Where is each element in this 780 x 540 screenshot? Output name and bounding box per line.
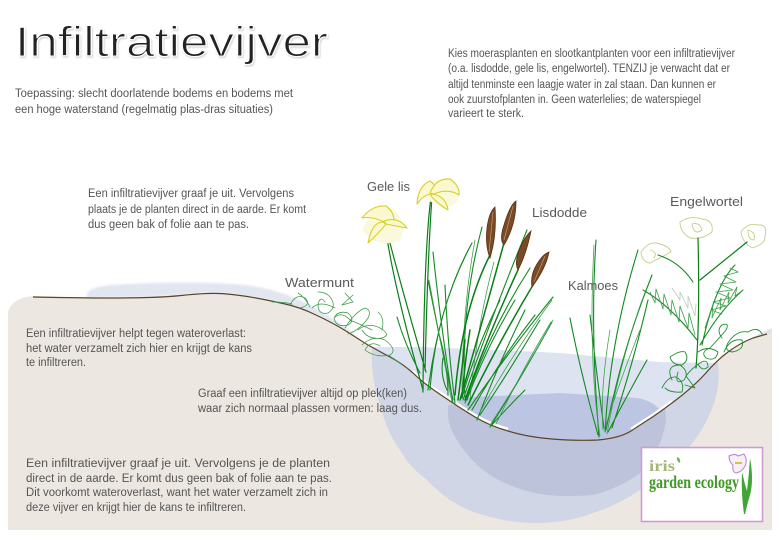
iris flower right: [418, 178, 459, 208]
cattail heads: [486, 207, 495, 258]
text: samenvatting: Een infiltratievijver graaf je uit. Vervolgens je de planten: [26, 458, 330, 470]
soil cross-section: [8, 293, 772, 530]
text: samenvatting: [26, 458, 332, 514]
deep water: [447, 393, 667, 445]
umbel flowers: [680, 218, 712, 238]
text: plantkeuze: [448, 48, 735, 120]
text: plantkeuze: varieert te sterk.: [448, 108, 524, 120]
plant: gele lis: [362, 178, 459, 392]
plant: kalmoes: [570, 240, 652, 437]
thin leaves: [429, 240, 553, 425]
text: wateroverlast: [26, 328, 252, 369]
text: aanleg: [88, 188, 307, 231]
logo leaf mark: [677, 457, 680, 463]
text: toepassing: [15, 88, 294, 116]
label: watermunt: Watermunt: [285, 275, 354, 290]
saturated soil below the pond: [372, 345, 719, 523]
text: wateroverlast: Een infiltratievijver helpt tegen wateroverlast:: [26, 328, 246, 340]
iris stems: [385, 197, 432, 392]
text: samenvatting: direct in de aarde. Er komt dus geen bak of folie aan te pas.: [26, 473, 332, 485]
text: plantkeuze: ook zuurstofplanten in. Geen waterlelies; de waterspiegel: [448, 94, 701, 106]
label: kalmoes: Kalmoes: [568, 278, 618, 293]
stems: [696, 238, 747, 368]
text: plek: [197, 388, 422, 415]
water above ground: [372, 347, 716, 445]
logo iris flower: [729, 454, 746, 473]
wet patch right bank: [745, 328, 772, 341]
logo: iris garden ecology: garden ecology: [649, 472, 739, 492]
text: samenvatting: deze vijver en krijgt hier de kans te infiltreren.: [26, 502, 246, 514]
text: plek: Graaf een infiltratievijver altijd op plek(ken): [198, 388, 407, 400]
fern leaves: [650, 268, 743, 335]
text: aanleg: plaats je de planten direct in de aarde. Er komt: [88, 204, 307, 216]
text: samenvatting: Dit voorkomt wateroverlast, want het water verzamelt zich in: [26, 487, 328, 499]
outer wet zone: [372, 345, 719, 523]
text: plantkeuze: Kies moerasplanten en slootkantplanten voor een infiltratievijver: [448, 48, 735, 60]
text: wateroverlast: het water verzamelt zich hier en krijgt de kans: [26, 343, 252, 355]
text: wateroverlast: te infiltreren.: [26, 357, 86, 369]
logo text: iris: [649, 458, 675, 475]
text: plek: waar zich normaal plassen vormen: laag dus.: [197, 403, 422, 415]
white bank highlight: [413, 371, 672, 429]
text: plantkeuze: altijd tenminste een laagje water in zal staan. Dan kunnen er: [448, 79, 716, 91]
text: aanleg: dus geen bak of folie aan te pas.: [88, 219, 249, 231]
ground scribble: [662, 324, 762, 392]
soil surface: [33, 293, 767, 440]
text: toepassing: Toepassing: slecht doorlatende bodems en bodems met: [15, 88, 294, 100]
logo: iris garden ecology: [642, 448, 762, 522]
text: toepassing: een hoge waterstand (regelmatig plas-dras situaties): [15, 104, 273, 116]
label: gele lis: Gele lis: [367, 179, 410, 194]
label: engelwortel: Engelwortel: [670, 194, 743, 209]
plant labels: [285, 179, 743, 293]
plant: engelwortel: [641, 218, 766, 392]
text: plantkeuze: (o.a. lisdodde, gele lis, engelwortel). TENZIJ je verwacht dat er: [448, 63, 730, 75]
label: lisdodde: Lisdodde: [532, 205, 587, 220]
inner wet zone: [448, 405, 666, 496]
logo iris leaf: [742, 458, 752, 514]
title: Infiltratievijver: [15, 18, 328, 65]
light water: [372, 347, 716, 445]
cattail leaves: [397, 227, 553, 427]
ground line: [33, 293, 767, 440]
plant: watermunt: [272, 292, 402, 364]
cattail stripes: [489, 206, 545, 282]
iris flower left: [362, 208, 403, 243]
cattail stalks: [455, 243, 533, 405]
plant: lisdodde: [397, 201, 553, 427]
text: aanleg: Een infiltratievijver graaf je uit. Vervolgens: [88, 188, 294, 200]
wet ground patch: [87, 282, 360, 338]
